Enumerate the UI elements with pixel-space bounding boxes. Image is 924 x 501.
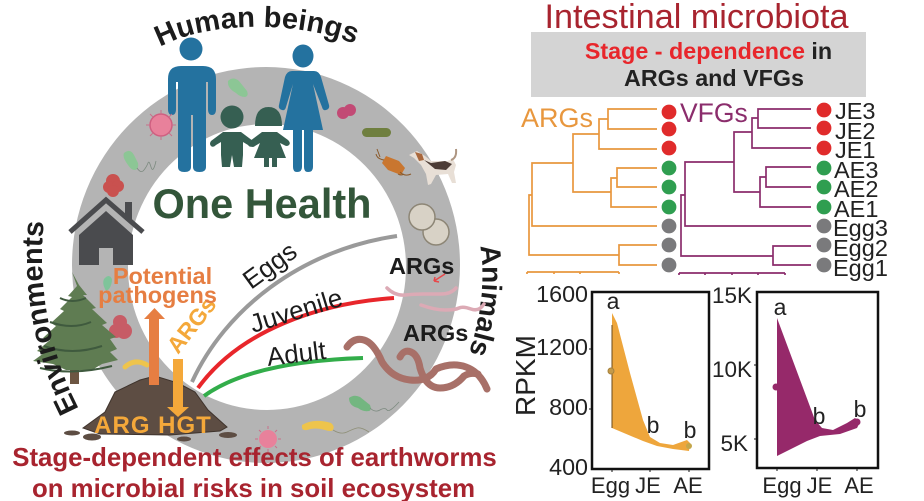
significance letters: b — [854, 396, 866, 422]
significance letters: b — [647, 412, 659, 438]
y tick labels: 5K — [720, 431, 748, 456]
icon: red arrow — [434, 274, 445, 282]
sample dots: VFGs — [817, 103, 831, 272]
arrow: up to potential pathogens — [144, 308, 165, 385]
chart: ARGs RPKM — [510, 281, 709, 498]
icon: eggs — [409, 204, 449, 245]
sample labels: AE2 — [834, 176, 878, 202]
y tick labels: 10K — [712, 357, 752, 382]
icon: green bacterium — [124, 151, 156, 172]
plot frame — [757, 292, 878, 468]
stage curves — [192, 236, 397, 396]
heading: Environments: Environments — [23, 222, 78, 416]
icon: pink virus bottom — [255, 426, 281, 452]
icon: girl — [248, 107, 290, 167]
x tick labels: AE — [673, 473, 703, 498]
icon: pine tree — [33, 272, 118, 384]
banner text line 1: Stage - dependence in — [585, 38, 832, 64]
caption: Stage-dependent effects of earthworms — [12, 444, 497, 472]
y tick labels: 1600 — [536, 281, 588, 307]
y tick labels: 1200 — [536, 334, 588, 360]
mean points — [608, 368, 614, 374]
icon: olive bacterium — [362, 128, 391, 137]
significance letters: b — [813, 403, 825, 429]
icon: green bacterium left — [103, 276, 112, 290]
icon: yellow arc left — [125, 362, 147, 367]
label: VFGs: VFGs — [680, 98, 748, 128]
x tick labels: AE — [844, 473, 874, 498]
label: Juvenile: Juvenile — [246, 282, 346, 339]
label: ARGs lower: ARGs — [403, 320, 468, 346]
curve: adult — [204, 358, 363, 396]
icon: dog — [409, 149, 456, 185]
arrow: ARGs down — [167, 359, 189, 417]
sample labels: Egg2 — [833, 235, 888, 261]
label: Adult: Adult — [265, 335, 328, 372]
heading: Animals: Animals — [470, 246, 502, 356]
sample labels: Egg3 — [833, 215, 888, 241]
icons: human family — [168, 38, 329, 172]
icon: woman — [279, 44, 329, 172]
icon: yellow bacterium — [302, 421, 334, 431]
dendrogram: ARGs — [527, 109, 657, 274]
icon: juvenile worms — [387, 288, 484, 310]
curve: juvenile — [198, 298, 394, 388]
icon: red cluster left — [109, 315, 132, 339]
chart: VFGs RPKM — [712, 283, 878, 498]
icon: boy — [210, 106, 254, 167]
icon: pink virus — [146, 110, 176, 140]
sample labels: JE1 — [835, 137, 876, 163]
banner text line 2: ARGs and VFGs — [624, 65, 804, 91]
label: ARGs: ARGs — [521, 103, 593, 133]
sample labels: JE2 — [835, 118, 876, 144]
label: ARGs upper: ARGs — [389, 253, 454, 279]
One Health ring — [72, 67, 460, 463]
x tick labels: Egg — [591, 473, 630, 498]
axis ticks — [589, 349, 689, 472]
icon: orange bacterium — [376, 149, 411, 175]
sample labels: Egg1 — [833, 255, 888, 281]
heading: Human beings: Human beings — [154, 6, 358, 46]
icon: adult earthworms — [347, 339, 487, 389]
sample labels: JE3 — [835, 98, 876, 124]
y tick labels: 15K — [712, 283, 752, 308]
y tick labels: 400 — [549, 454, 588, 480]
sample labels: AE1 — [834, 196, 878, 222]
axis ticks — [754, 365, 857, 471]
icon: small green bacterium — [349, 396, 371, 411]
significance letters: a — [607, 288, 620, 314]
label: potential pathogens: Potential — [113, 263, 212, 289]
panel: stage-dependence banner — [531, 32, 866, 97]
y tick labels: 800 — [549, 394, 588, 420]
icon: man — [168, 38, 216, 172]
orange area — [612, 313, 690, 451]
x tick labels: Egg — [762, 473, 802, 498]
label: ARG HGT: ARG HGT — [94, 412, 212, 439]
curve: eggs — [192, 236, 397, 382]
plot frame — [592, 292, 709, 469]
icon: magenta cluster — [337, 104, 356, 119]
label: potential pathogens: pathogens — [98, 282, 217, 308]
label: ARGs diagonal: ARGs — [161, 292, 221, 358]
icon: red cluster — [103, 174, 124, 197]
sample labels: AE3 — [834, 157, 878, 183]
microbes on ring — [103, 78, 456, 452]
label: Eggs: Eggs — [237, 236, 302, 295]
icon: soil mound — [64, 376, 237, 442]
x tick labels: JE — [807, 473, 832, 498]
title: One Health: One Health — [152, 180, 372, 227]
sample dots: ARGs — [662, 105, 676, 272]
x tick labels: JE — [635, 473, 661, 498]
significance letters: a — [774, 294, 787, 320]
significance letters: b — [684, 417, 696, 443]
purple area — [777, 318, 860, 456]
icon: green bacterium top — [228, 78, 248, 97]
axis title: RPKM — [510, 335, 541, 416]
dendrogram: VFGs — [679, 109, 811, 275]
icon: house — [70, 200, 143, 265]
